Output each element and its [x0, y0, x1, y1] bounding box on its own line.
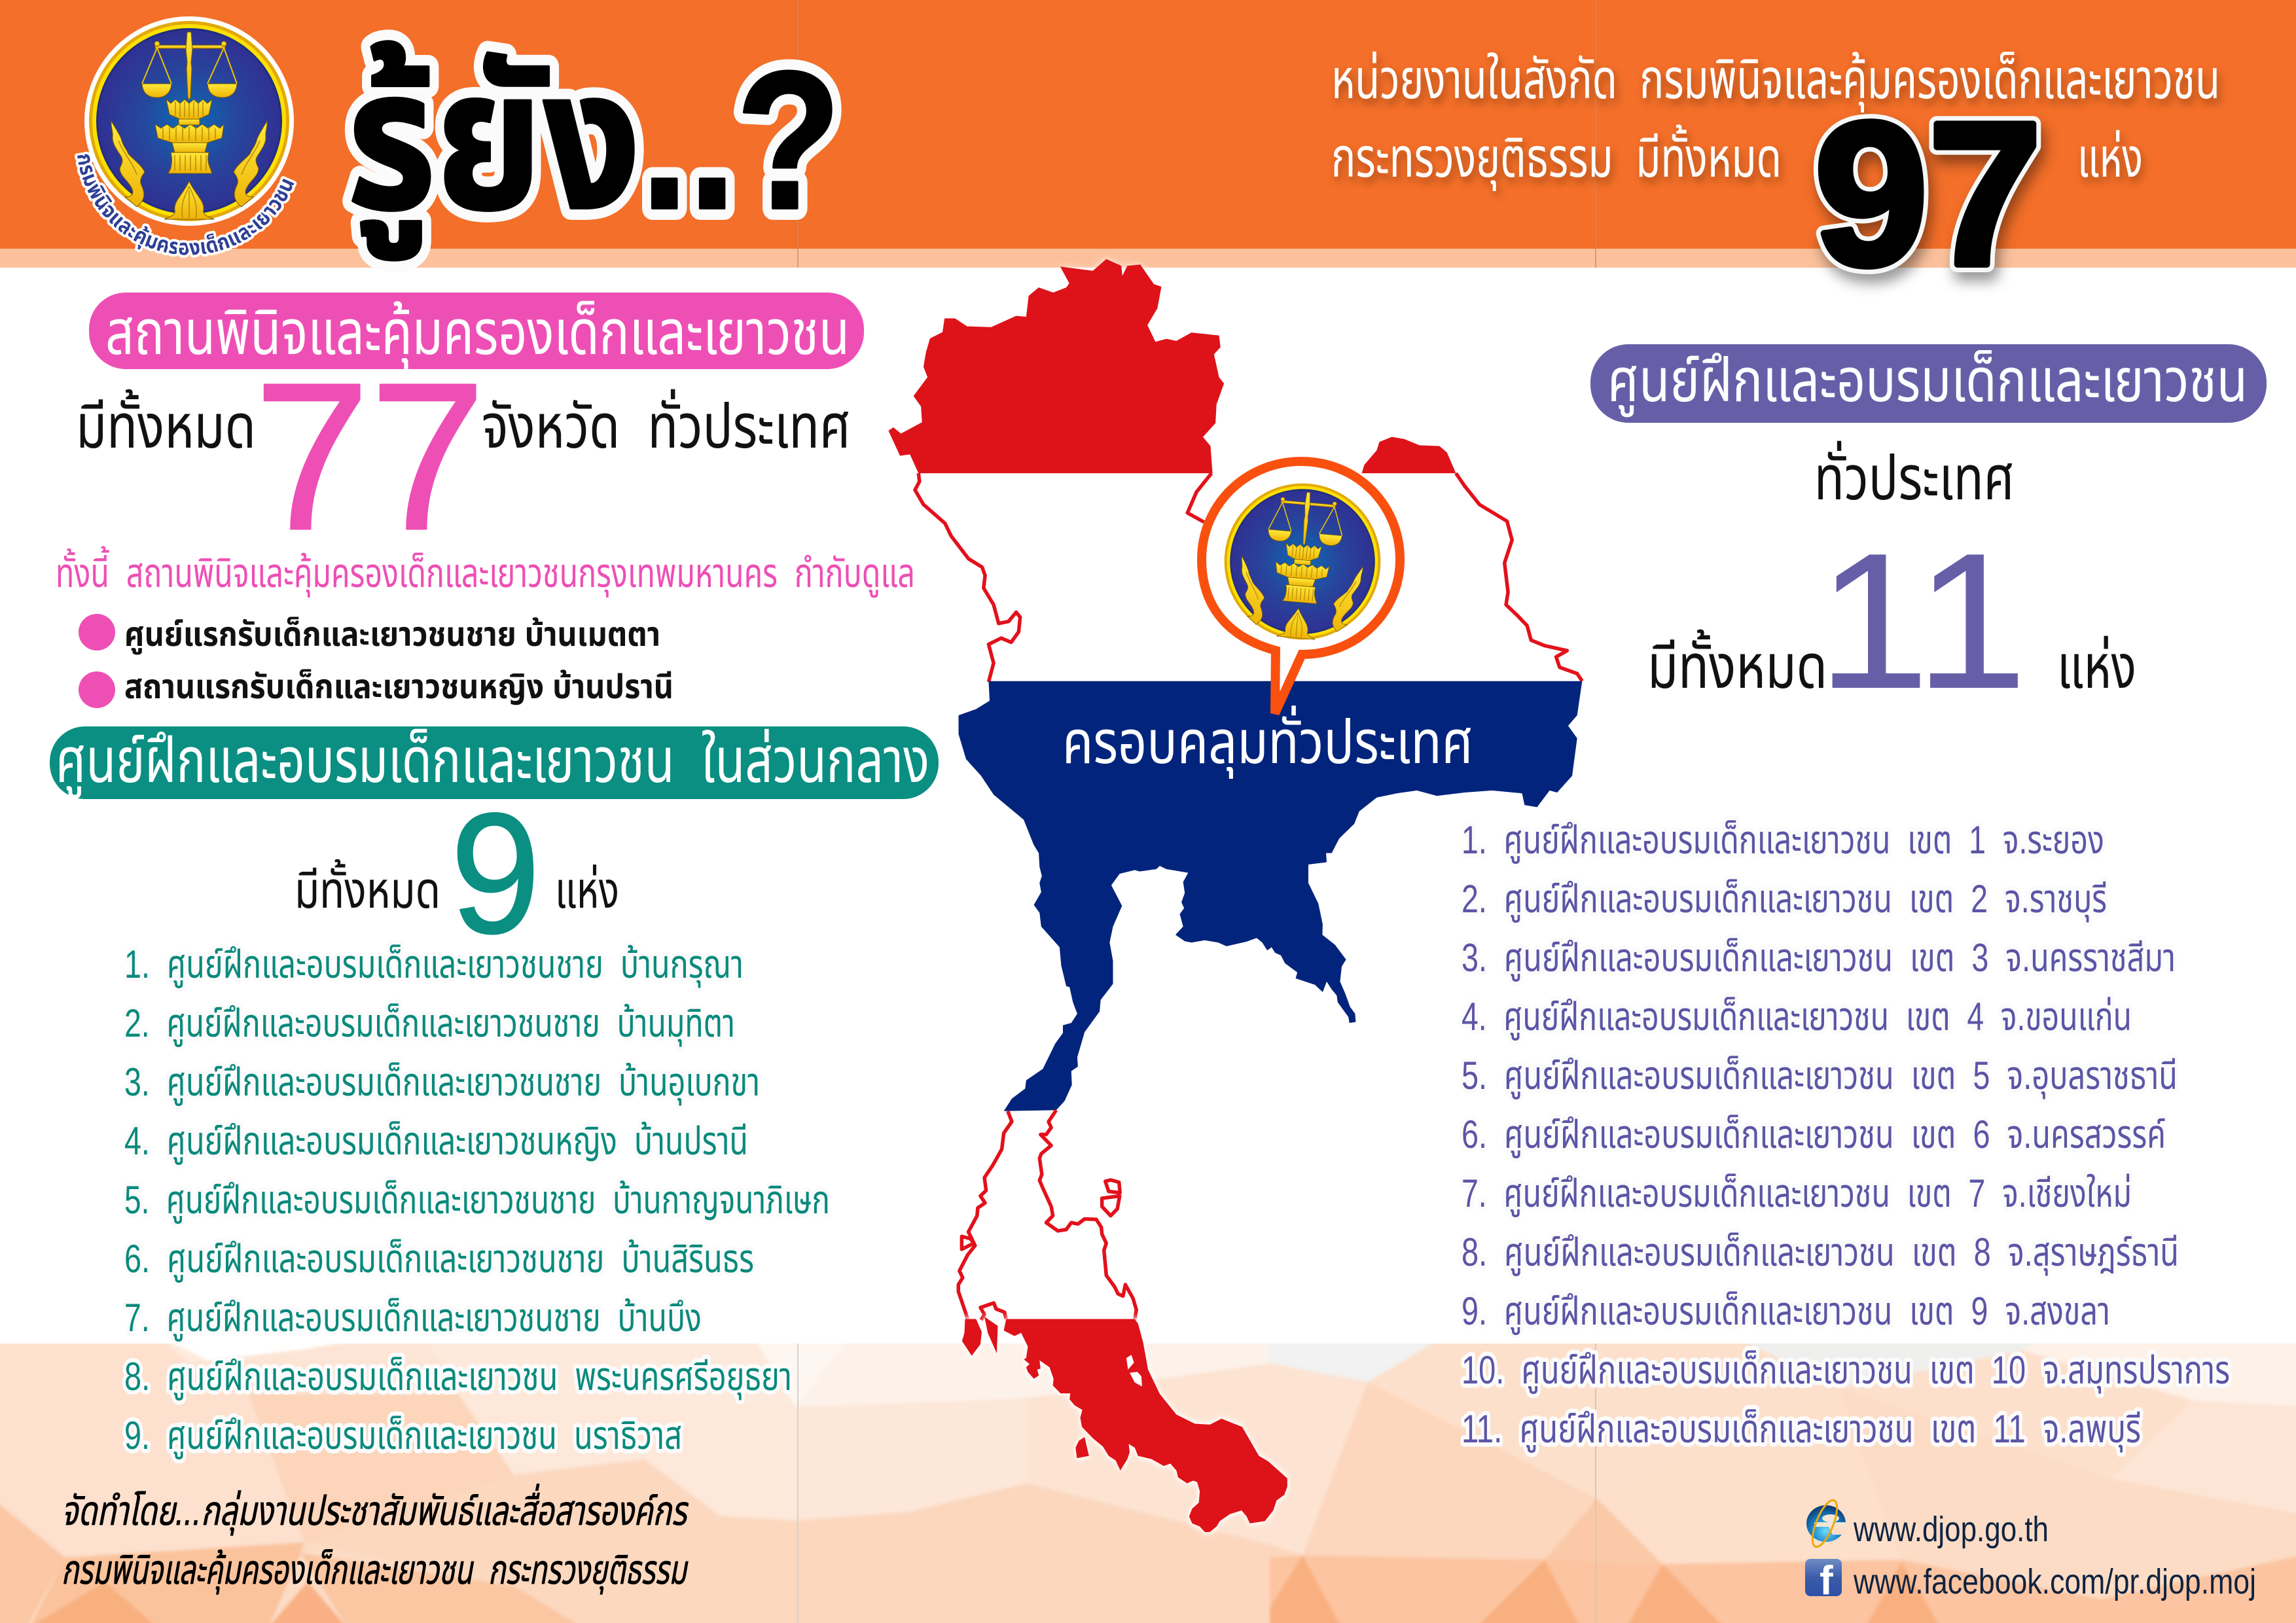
icon: facebook: f [1820, 1558, 1833, 1603]
text: provinces: จังหวัด ทั่วประเทศ [482, 389, 851, 461]
list: central centres: 5. ศูนย์ฝึกและอบรมเด็กและเยาวชนชาย บ้านกาญจนาภิเษก [124, 1178, 830, 1224]
panel: regional training centres [1462, 344, 2267, 1453]
list: regional centres [1462, 818, 2230, 1453]
logo: department seal with curved name [75, 16, 297, 258]
panel: provincial observation centres: สถานพินิจและคุ้มครองเด็กและเยาวชน [105, 298, 850, 370]
text: unit: แห่ง [555, 861, 619, 919]
list: central centres: 6. ศูนย์ฝึกและอบรมเด็กและเยาวชนชาย บ้านสิรินธร [124, 1237, 754, 1283]
list: central centres: 8. ศูนย์ฝึกและอบรมเด็กและเยาวชน พระนครศรีอยุธยา [124, 1355, 792, 1400]
bullet two: สถานแรกรับเด็กและเยาวชนหญิง บ้านปรานี [124, 668, 673, 706]
header number 97: 97 [1814, 80, 2042, 308]
panel: provincial observation centres [56, 293, 915, 708]
list: regional centres: 9. ศูนย์ฝึกและอบรมเด็กและเยาวชน เขต 9 จ.สงขลา [1462, 1289, 2110, 1335]
header: orange banner [0, 0, 2296, 249]
title: รู้ยัง..? [347, 30, 841, 260]
pill heading: purple [1590, 344, 2267, 423]
panel: central training centres [50, 726, 939, 1459]
header number 97: 97 [1814, 80, 2042, 308]
text: total label: มีทั้งหมด [76, 389, 256, 461]
text: total label: มีทั้งหมด [295, 859, 440, 919]
bullet one: ศูนย์แรกรับเด็กและเยาวชนชาย บ้านเมตตา [124, 616, 660, 655]
text: pink note: ทั้งนี้ สถานพินิจและคุ้มครองเด็กและเยาวชนกรุงเทพมหานคร กำกับดูแล [56, 546, 915, 598]
map of Thailand in flag colours [888, 259, 1582, 1532]
text: website: www.djop.go.th [1853, 1510, 2049, 1549]
background: low-poly peach footer [0, 1335, 2296, 1623]
text: unit: แห่ง [2057, 632, 2136, 701]
header: pale orange strip [0, 249, 2296, 268]
map: southern section [958, 849, 1355, 1532]
list: regional centres: 1. ศูนย์ฝึกและอบรมเด็กและเยาวชน เขต 1 จ.ระยอง [1462, 818, 2104, 864]
header text: line two: กระทรวงยุติธรรม มีทั้งหมด [1331, 124, 1782, 191]
list: central centres: 1. ศูนย์ฝึกและอบรมเด็กและเยาวชนชาย บ้านกรุณา [124, 942, 744, 988]
number 9: 9 [450, 777, 541, 969]
list: regional centres: 2. ศูนย์ฝึกและอบรมเด็กและเยาวชน เขต 2 จ.ราชบุรี [1462, 877, 2107, 923]
pill heading: pink [89, 293, 864, 369]
list: central centres: 4. ศูนย์ฝึกและอบรมเด็กและเยาวชนหญิง บ้านปรานี [124, 1119, 748, 1165]
logo: department seal with curved name: กรมพินิจและคุ้มครองเด็กและเยาวชน [75, 152, 297, 258]
credit: produced by [62, 1484, 689, 1595]
text: total label: มีทั้งหมด [1647, 629, 1827, 701]
icon: web browser [1806, 1497, 1847, 1550]
icon: seal [1214, 473, 1391, 650]
panel: central training centres: ศูนย์ฝึกและอบรมเด็กและเยาวชน ในส่วนกลาง [56, 726, 929, 799]
credit: produced by: กรมพินิจและคุ้มครองเด็กและเยาวชน กระทรวงยุติธรรม [62, 1548, 689, 1595]
list: central centres: 7. ศูนย์ฝึกและอบรมเด็กและเยาวชนชาย บ้านบึง [124, 1296, 702, 1342]
icon: facebook [1805, 1558, 1842, 1603]
pill heading: teal [50, 726, 939, 799]
callout: seal in speech bubble [1202, 461, 1400, 713]
number 77: 77 [254, 339, 486, 573]
text: nationwide: ทั่วประเทศ [1814, 440, 2015, 512]
number 11: 11 [1817, 512, 2028, 729]
list: central centres: 2. ศูนย์ฝึกและอบรมเด็กและเยาวชนชาย บ้านมุทิตา [124, 1001, 735, 1047]
map: northern red section [888, 259, 1582, 853]
map label: ครอบคลุมทั่วประเทศ [1062, 705, 1473, 779]
title: รู้ยัง..? [347, 30, 841, 260]
credit: produced by: จัดทำโดย...กลุ่มงานประชาสัมพันธ์และสื่อสารองค์กร [62, 1484, 689, 1536]
header text: unit: แห่ง [2077, 127, 2143, 188]
list: central centres [124, 942, 830, 1459]
list: central centres: 9. ศูนย์ฝึกและอบรมเด็กและเยาวชน นราธิวาส [124, 1414, 682, 1459]
list: central centres: 3. ศูนย์ฝึกและอบรมเด็กและเยาวชนชาย บ้านอุเบกขา [124, 1060, 760, 1106]
